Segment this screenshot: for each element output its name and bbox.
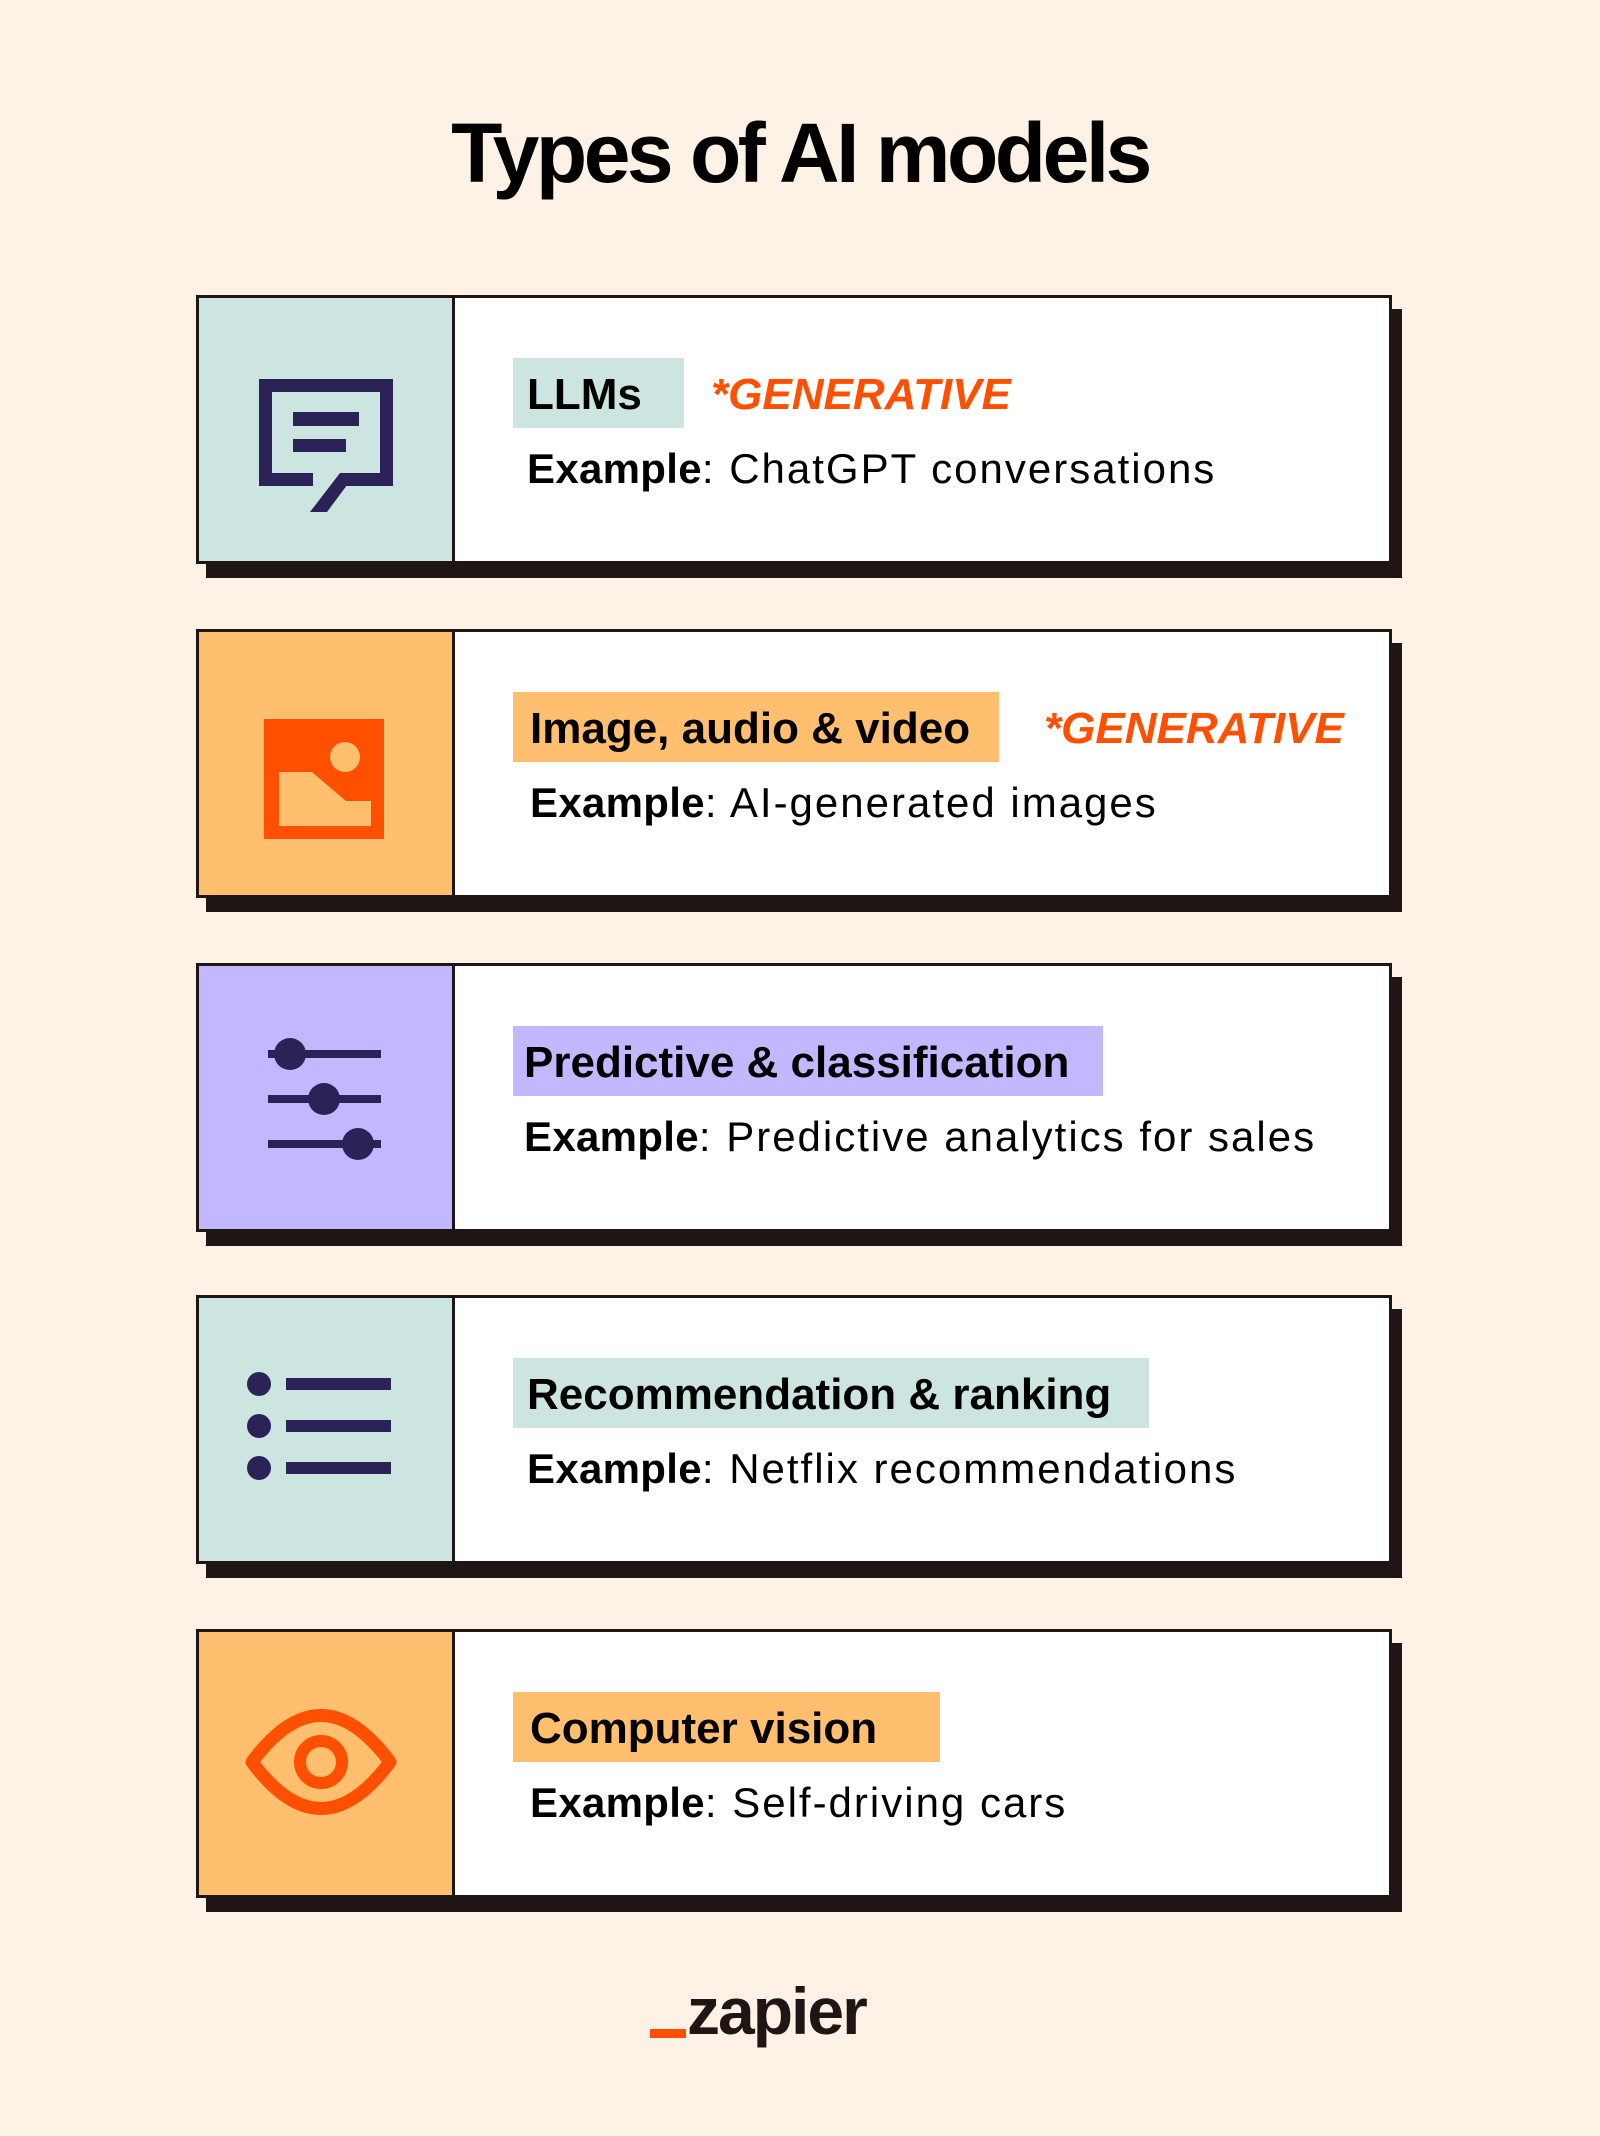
icon: eye [196,1629,455,1898]
logo: zapier: zapier [687,1974,866,2048]
label: computer vision: Computer vision [530,1704,877,1753]
label: image audio video [513,692,999,762]
label: recommendation: Recommendation & ranking [527,1370,1111,1419]
panel: recommendation [196,1295,1402,1578]
icon: chat bubble [196,295,455,564]
panel: image audio video [196,629,1402,912]
label: LLMs [513,358,684,428]
label: image audio video: Image, audio & video [530,704,970,753]
example text: Example: AI-generated images [530,779,1158,826]
example text: Example: Netflix recommendations [527,1445,1237,1492]
example text: Example: ChatGPT conversations [527,445,1216,492]
label: predictive: Predictive & classification [524,1038,1069,1087]
label: LLMs: LLMs [527,370,642,419]
panel: LLMs [196,295,1402,578]
panel: predictive [196,963,1402,1246]
icon: image [196,629,455,898]
icon: list [196,1295,455,1564]
generative tag: *GENERATIVE [1044,704,1344,753]
example text: Example: Predictive analytics for sales [524,1113,1316,1160]
label: predictive [513,1026,1103,1096]
label: computer vision [513,1692,940,1762]
icon: sliders [196,963,455,1232]
panel: computer vision [196,1629,1402,1912]
label: recommendation [513,1358,1149,1428]
title: Types of AI models [451,106,1149,200]
example text: Example: Self-driving cars [530,1779,1067,1826]
generative tag: *GENERATIVE [711,370,1011,419]
